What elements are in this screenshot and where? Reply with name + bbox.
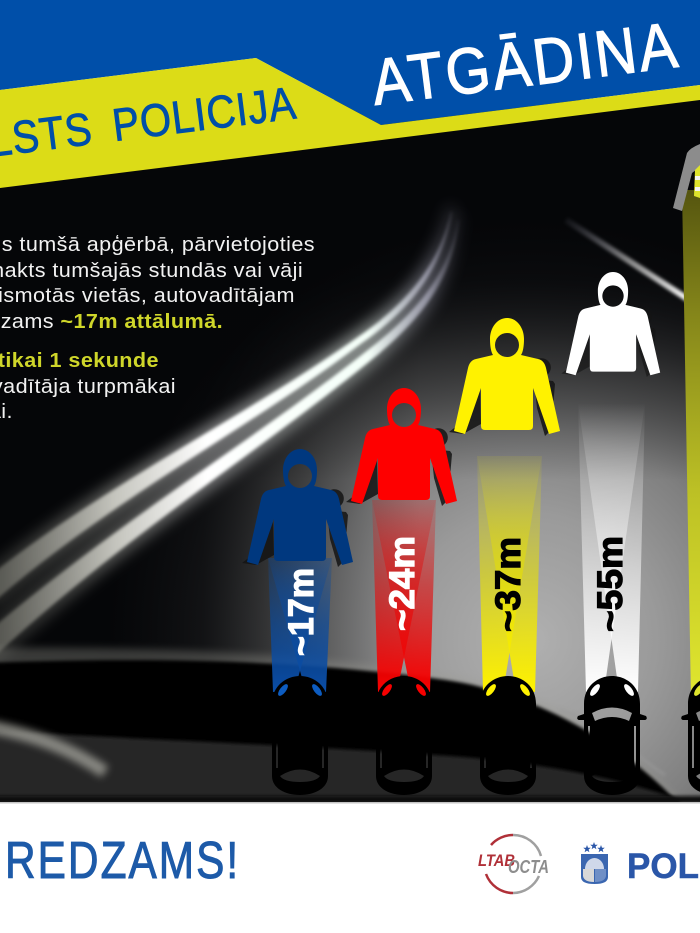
- beam: blue: [268, 558, 332, 692]
- right light streak: [566, 220, 700, 307]
- figure: high-visibility vest pedestrian: [673, 144, 700, 211]
- group: yellow pedestrian: [449, 318, 560, 692]
- header blue band: [0, 0, 700, 125]
- footer panel: [0, 802, 700, 933]
- beam: yellow: [477, 456, 542, 692]
- group: red pedestrian: [346, 388, 457, 692]
- beam: red: [372, 500, 436, 692]
- logo: LTAB OCTA: [478, 835, 549, 893]
- distance: 55m: ~55m: [591, 536, 630, 632]
- car: far right: [681, 676, 700, 795]
- light streaks on road: [0, 212, 459, 655]
- group: blue pedestrian: [242, 449, 353, 692]
- distance: 17m: ~17m: [282, 568, 321, 656]
- car: yellow beam: [473, 676, 543, 795]
- logo: police coat of arms: [581, 842, 608, 884]
- beam: white: [578, 403, 645, 692]
- car: red beam: [369, 676, 439, 795]
- car: white beam: [577, 676, 647, 795]
- distance: 37m: ~37m: [489, 537, 528, 632]
- footer slogan: REDZAMS!: [5, 832, 240, 890]
- car: blue beam: [265, 676, 335, 795]
- logo: LTAB OCTA: LTAB: [478, 851, 515, 870]
- header yellow ribbon: [0, 58, 700, 188]
- logo: LTAB OCTA: OCTA: [508, 857, 549, 877]
- night road with grey headlight haze: [0, 100, 700, 805]
- header title: ATGĀDINA: [368, 8, 684, 119]
- body text: [0, 234, 315, 423]
- car hood foreground: [0, 648, 700, 806]
- distance: 24m: ~24m: [383, 536, 422, 631]
- beam: far right high-visibility: [682, 190, 700, 700]
- group: white pedestrian: [561, 272, 660, 692]
